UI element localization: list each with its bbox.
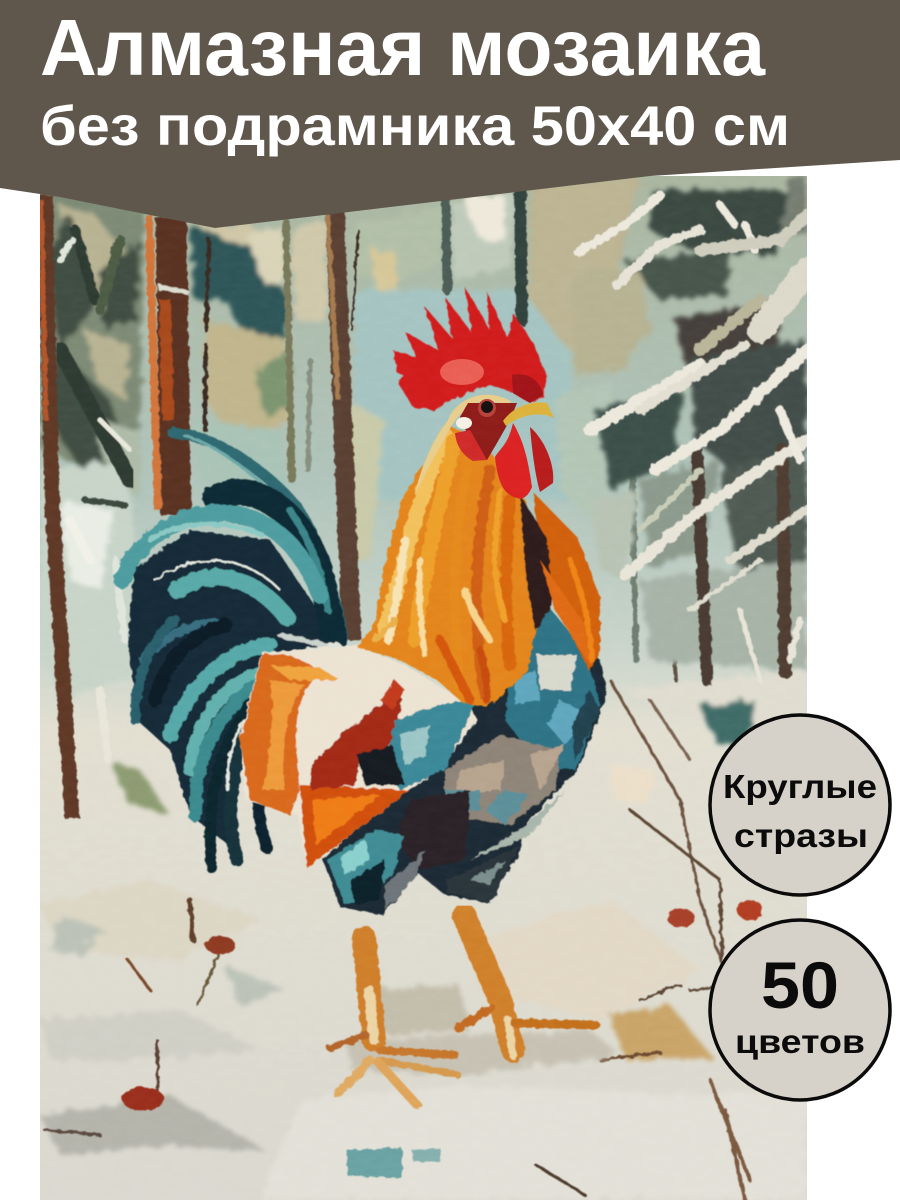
pine trunks and snow: [578, 195, 807, 680]
rooster shadow on snow: [345, 1030, 620, 1075]
rooster: [122, 287, 620, 1105]
banner shape: [0, 0, 900, 228]
rooster head and face: [460, 403, 517, 460]
ear patch: [456, 417, 472, 429]
rooster wattles: [455, 423, 553, 499]
rooster neck feather strokes: [375, 435, 592, 700]
badge circle: [710, 920, 890, 1100]
header banner: [0, 0, 900, 228]
rooster eye: [478, 399, 496, 417]
rooster comb highlight: [440, 359, 484, 385]
rooster comb: [393, 287, 547, 410]
badge circle: [710, 715, 890, 895]
bare branches and red leaves on the ground: [45, 680, 763, 1200]
badge: 50 colours: [710, 920, 890, 1100]
painting background: [40, 176, 807, 1200]
snowy pine tree: [573, 176, 807, 680]
distant tree trunks: [205, 190, 676, 680]
badge text: цветов: [735, 1023, 865, 1060]
rooster neck feathers: [357, 425, 600, 707]
rooster wing and saddle: [240, 645, 477, 868]
canvas texture overlay: [40, 176, 807, 1200]
rooster comb fold: [512, 374, 543, 403]
badge: round rhinestones: [710, 715, 890, 895]
badge text line 1: Круглые: [723, 768, 877, 805]
rooster body: [323, 600, 607, 915]
left foliage strokes: [60, 230, 130, 760]
badge number: 50: [761, 948, 839, 1022]
pine needles: [573, 176, 807, 670]
rooster legs and feet: [330, 915, 595, 1105]
rooster beak: [503, 402, 554, 426]
rooster tail: [122, 433, 345, 868]
forest background brushwork: [40, 176, 807, 1200]
foreground tree trunks: [41, 195, 352, 818]
subtitle: без подрамника 50х40 см: [40, 94, 790, 157]
golden head feathers: [415, 395, 512, 495]
title: Алмазная мозаика: [40, 3, 765, 92]
painting: rooster in snowy forest: [40, 176, 807, 1200]
badge text line 2: стразы: [734, 817, 868, 854]
